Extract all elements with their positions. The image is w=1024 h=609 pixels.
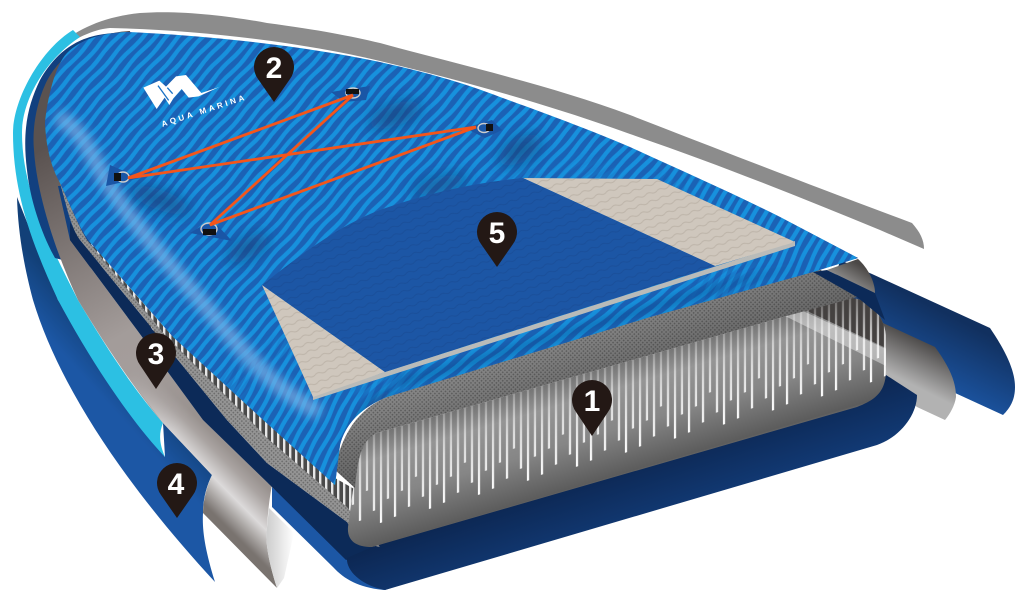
layer: navy shadow under flap [813,270,885,320]
grey flap under board [827,259,875,293]
pin 3: 3 [148,338,164,371]
logo: AM mark [143,75,219,109]
layer: silver rail cut end [203,470,277,588]
bungee cord [128,95,476,225]
pin 1 [572,380,612,436]
core: light diagonal band [785,311,886,366]
deck: rail wave direction [376,165,756,402]
pin 2 [254,47,294,102]
logo: wordmark: AQUA MARINA [160,93,248,129]
layer: navy inner band [25,33,130,270]
hull: blue lower rail [272,487,400,590]
layer: right navy laminate end [830,260,1015,415]
layer: silver rail band [33,31,272,487]
pad: beige sections [262,178,795,397]
pin 1: 1 [584,385,600,418]
d-ring: left [106,165,140,186]
deck: shade near lower edge [337,270,778,461]
core: end shadow [805,298,886,348]
hull: navy strip under mesh [70,222,380,560]
pin 5: 5 [489,217,505,250]
pin 4 [157,463,197,518]
layer 3: cyan rail band [13,30,165,457]
hull: dark underside [347,375,917,590]
d-ring: top [331,86,370,102]
d-ring: right [465,120,502,138]
deck: soft shadows [127,95,547,269]
pad: blue section [262,178,715,372]
pin 5 [477,212,517,267]
pad: edge thickness [313,241,795,400]
traction pad [262,178,795,400]
pin 2: 2 [266,52,282,85]
drop-stitch serrated edge [88,240,356,522]
d-ring: bottom [190,223,232,241]
pin 4: 4 [168,468,185,501]
layer 1: drop-stitch core [340,290,890,550]
logo: Aqua Marina [143,75,248,129]
core: drop-stitch threads [352,298,886,523]
pin 3 [136,333,176,389]
layer: grey top laminate [25,12,924,249]
layer 2: wave-patterned deck [45,32,858,485]
soft shadow beside silver end [266,508,294,588]
deck: right tip wave direction [660,164,858,310]
mesh shading [335,262,857,488]
layer: right silver laminate end [800,300,956,420]
layer 4: outer blue rail [17,197,215,582]
mesh side strip [60,183,380,547]
deck: rail highlight [57,117,320,412]
mesh top layer [335,262,857,488]
deck: lower corner wave direction [218,339,388,485]
layer: silver rail highlight [137,376,272,487]
